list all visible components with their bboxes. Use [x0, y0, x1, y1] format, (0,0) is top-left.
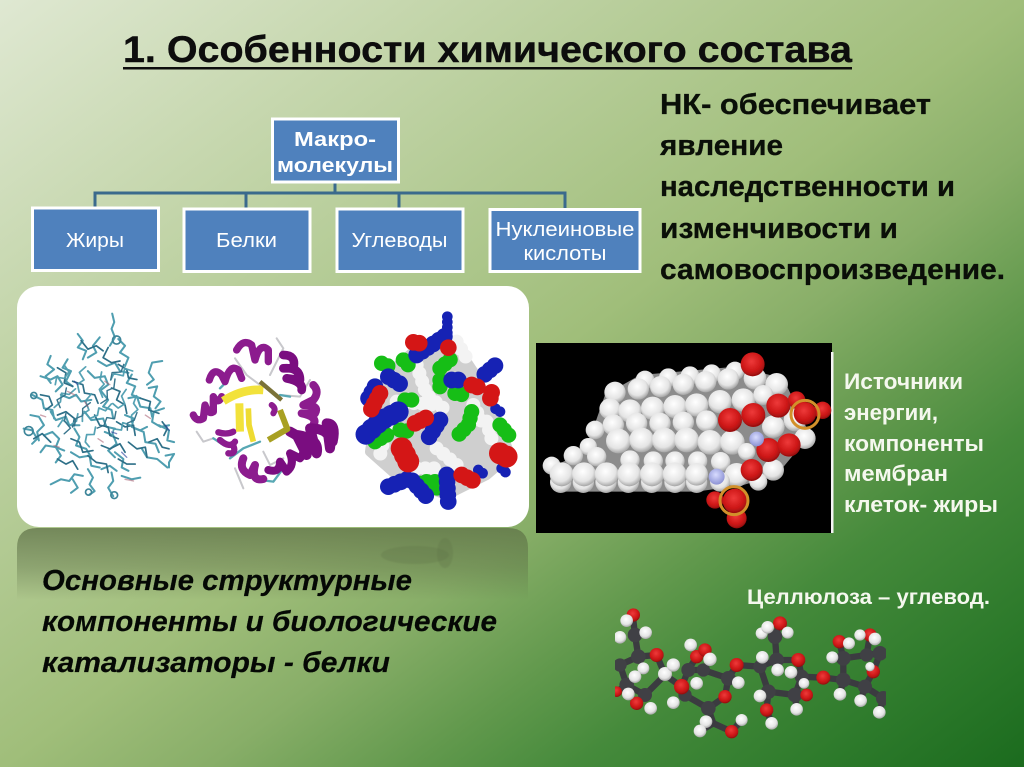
- carbon atoms: [613, 628, 891, 716]
- text: proteins function: компоненты и биологические: [42, 606, 497, 638]
- text: nucleic acids role: НК- обеспечивает: [660, 89, 931, 121]
- hydrogen atoms: [614, 614, 886, 737]
- label: cellulose: Целлюлоза – углевод.: [747, 586, 990, 609]
- text: nucleic acids role: самовоспроизведение.: [660, 254, 1005, 286]
- protein: ribbon model: [193, 338, 334, 488]
- connectors: [95, 182, 565, 208]
- box: macromolecules: Макро-: [294, 129, 376, 151]
- text: lipid function: [844, 369, 998, 517]
- box: nucleic acids: Нуклеиновые: [496, 219, 634, 241]
- box: carbohydrates: Углеводы: [352, 230, 448, 252]
- text: lipid function: мембран: [844, 461, 948, 486]
- text: nucleic acids role: [659, 89, 1005, 286]
- text: lipid function: клеток- жиры: [844, 492, 998, 517]
- text: lipid function: Источники: [844, 369, 963, 394]
- phosphorus rings: [720, 400, 819, 515]
- protein: surface model: [363, 317, 510, 503]
- panel reflection: [17, 528, 528, 600]
- text: proteins function: Основные структурные: [42, 565, 412, 597]
- red oxygen atoms: [706, 352, 831, 528]
- molecule body underlay: [550, 367, 810, 492]
- image: fat molecule: [536, 343, 834, 533]
- box: fats: [32, 208, 158, 270]
- box: nucleic acids: кислоты: [524, 243, 606, 265]
- text: proteins function: [42, 565, 497, 679]
- box: proteins: [184, 209, 310, 272]
- text: lipid function: энергии,: [844, 400, 938, 425]
- cellulose molecule: [611, 608, 891, 738]
- box: macromolecules: [272, 119, 398, 182]
- box: nucleic acids: [490, 210, 640, 272]
- text: proteins function: катализаторы - белки: [42, 647, 390, 679]
- text: nucleic acids role: наследственности и: [660, 171, 955, 203]
- white spheres: [543, 362, 816, 493]
- nitrogen atoms: [749, 432, 764, 446]
- panel: protein models: [17, 286, 529, 527]
- org chart: macromolecules: [32, 119, 640, 272]
- box: carbohydrates: [337, 209, 463, 272]
- box: fats: Жиры: [66, 230, 124, 252]
- oxygen atoms: [611, 608, 880, 738]
- text: lipid function: компоненты: [844, 431, 984, 456]
- title: 1. Особенности химического состава: [123, 29, 852, 70]
- text: nucleic acids role: явление: [659, 130, 783, 162]
- text: nucleic acids role: изменчивости и: [660, 213, 898, 245]
- protein: stick model: [24, 314, 174, 499]
- box: macromolecules: молекулы: [277, 155, 393, 177]
- box: proteins: Белки: [216, 230, 277, 252]
- bonds: [617, 620, 883, 732]
